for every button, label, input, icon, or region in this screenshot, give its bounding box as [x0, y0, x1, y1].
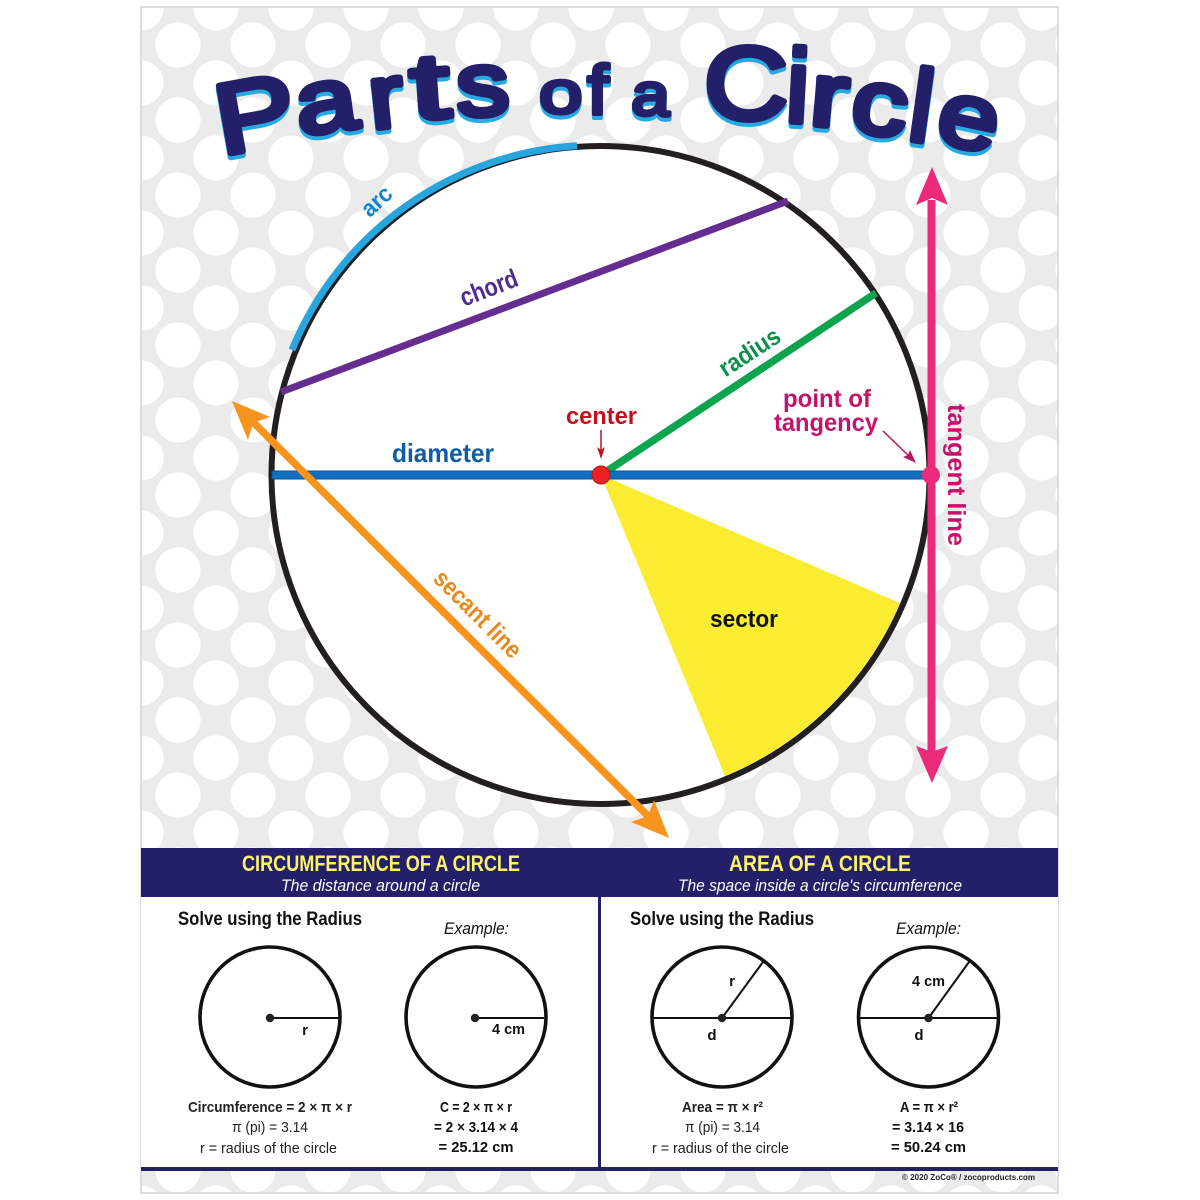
heading: area	[678, 851, 962, 895]
center point	[592, 466, 610, 484]
panel: area example diagram: d	[914, 1027, 924, 1044]
secant line	[232, 401, 669, 838]
text: area example: = 50.24 cm	[891, 1139, 966, 1156]
text: area example: = 3.14 × 16	[892, 1119, 964, 1136]
poster background	[141, 7, 1058, 1193]
label: diameter: diameter	[392, 438, 494, 468]
label: point of tangency: tangency	[774, 409, 878, 437]
label: center: center	[566, 403, 637, 430]
panel: area example diagram: 4 cm	[912, 973, 945, 990]
label: arc: arc	[356, 180, 398, 223]
main circle	[272, 146, 930, 804]
panel: circumference radius diagram: Solve using the Radius	[178, 909, 362, 930]
label: point of tangency	[774, 385, 878, 437]
panel: area radius diagram	[630, 909, 814, 1087]
panel: circumference example diagram: 4 cm	[492, 1021, 525, 1038]
panel divider	[598, 897, 601, 1167]
arrow: center	[597, 430, 605, 459]
text: area formula: Area = π × r²	[682, 1099, 763, 1116]
panel: circumference radius diagram: r	[302, 1022, 308, 1039]
text: area example	[891, 1099, 966, 1156]
text: circumference formula: r = radius of the circle	[200, 1140, 337, 1157]
text: circumference example: C = 2 × π × r	[440, 1099, 512, 1116]
title: a	[630, 60, 671, 129]
text: circumference example	[434, 1099, 519, 1156]
title: c	[846, 48, 915, 158]
arrow: point of tangency	[883, 431, 916, 463]
heading: circumference	[242, 851, 520, 895]
heading: area: AREA OF A CIRCLE	[729, 851, 911, 876]
text: area example: A = π × r²	[900, 1099, 958, 1116]
panel: area radius diagram: Solve using the Radius	[630, 909, 814, 930]
label: tangent line: tangent line	[942, 404, 970, 546]
title: f	[587, 50, 609, 129]
copyright: © 2020 ZoCo® / zocoproducts.com	[902, 1172, 1035, 1182]
title: o	[538, 58, 583, 126]
text: area formula: π (pi) = 3.14	[685, 1119, 760, 1136]
title	[206, 27, 1010, 176]
text: area formula	[652, 1099, 789, 1157]
panel: circumference example diagram: Example:	[444, 919, 509, 938]
text: area formula: r = radius of the circle	[652, 1140, 789, 1157]
panel: circumference radius diagram	[178, 909, 362, 1087]
sector	[601, 475, 900, 776]
heading: area: The space inside a circle's circumference	[678, 876, 962, 895]
label: radius: radius	[714, 322, 786, 383]
title: r	[807, 43, 853, 147]
heading: circumference: The distance around a circle	[281, 876, 480, 895]
title: r	[363, 44, 408, 148]
chord	[281, 201, 788, 392]
title: a	[289, 47, 363, 155]
title: P	[206, 53, 304, 176]
text: circumference formula: Circumference = 2 × π × r	[188, 1099, 352, 1116]
text: circumference example: = 2 × 3.14 × 4	[434, 1119, 519, 1136]
text: circumference example: = 25.12 cm	[438, 1139, 514, 1156]
title: i	[783, 29, 812, 146]
title: l	[903, 48, 941, 164]
text: circumference formula: π (pi) = 3.14	[232, 1119, 308, 1136]
title: e	[929, 60, 1010, 173]
title: s	[453, 32, 511, 136]
label: sector: sector	[710, 606, 778, 633]
arc	[292, 146, 577, 350]
title: C	[704, 27, 788, 141]
text: circumference formula	[188, 1099, 352, 1157]
panel: circumference example diagram	[406, 919, 546, 1087]
panel: area example diagram: Example:	[896, 919, 961, 938]
tangent line	[916, 167, 948, 783]
formula panel background	[141, 897, 1058, 1167]
panel: area radius diagram: r	[729, 973, 735, 990]
heading: circumference: CIRCUMFERENCE OF A CIRCLE	[242, 851, 520, 876]
panel: area example diagram	[858, 919, 998, 1087]
radius	[601, 293, 876, 475]
header band	[141, 848, 1058, 897]
label: point of tangency: point of	[783, 385, 872, 413]
label: chord: chord	[455, 263, 522, 312]
panel bottom rule	[141, 1167, 1058, 1171]
title: t	[407, 34, 452, 139]
diameter	[272, 471, 931, 479]
panel: area radius diagram: d	[707, 1027, 717, 1044]
label: secant line: secant line	[428, 564, 528, 664]
